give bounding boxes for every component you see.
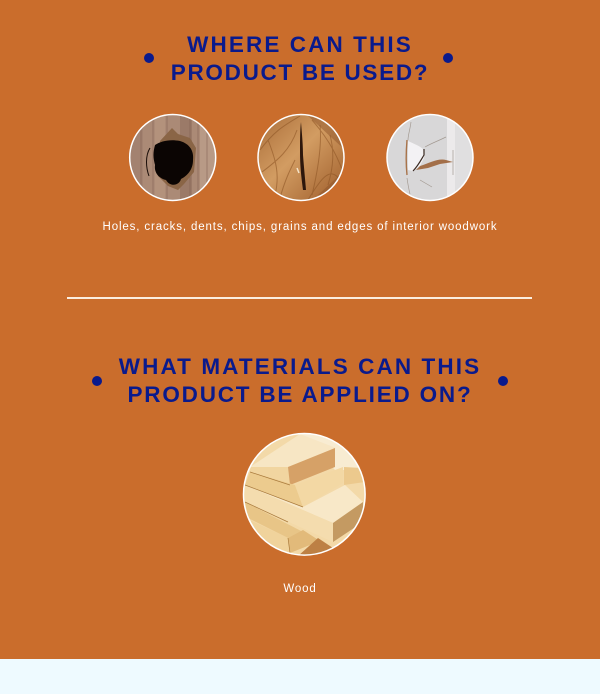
- usage photos and wood photo: [128, 114, 474, 556]
- icon: wood with hole: [129, 114, 217, 202]
- icon: damaged white surface: [387, 114, 474, 202]
- icon: stacked wood planks: [243, 433, 366, 556]
- heading: what materials can this product be applied on: [118, 354, 481, 407]
- bullet: right of first heading: [443, 53, 453, 63]
- caption: usage areas: Holes, cracks, dents, chips, grains and edges of interior woodwork: [103, 221, 497, 233]
- heading: where can this product be used: WHERE CAN THIS: [187, 32, 413, 57]
- bullet: left of first heading: [144, 53, 154, 63]
- caption: wood: Wood: [283, 583, 317, 595]
- section divider: [67, 297, 532, 299]
- bullet: right of second heading: [498, 376, 508, 386]
- heading: what materials can this product be applied on: WHAT MATERIALS CAN THIS: [119, 354, 481, 379]
- icon: wood with crack: [258, 114, 345, 202]
- heading: where can this product be used: PRODUCT BE USED?: [171, 60, 429, 85]
- bullet: left of second heading: [92, 376, 102, 386]
- heading: where can this product be used: [171, 32, 429, 85]
- bottom pale band: [0, 659, 600, 694]
- heading: what materials can this product be applied on: PRODUCT BE APPLIED ON?: [127, 382, 473, 407]
